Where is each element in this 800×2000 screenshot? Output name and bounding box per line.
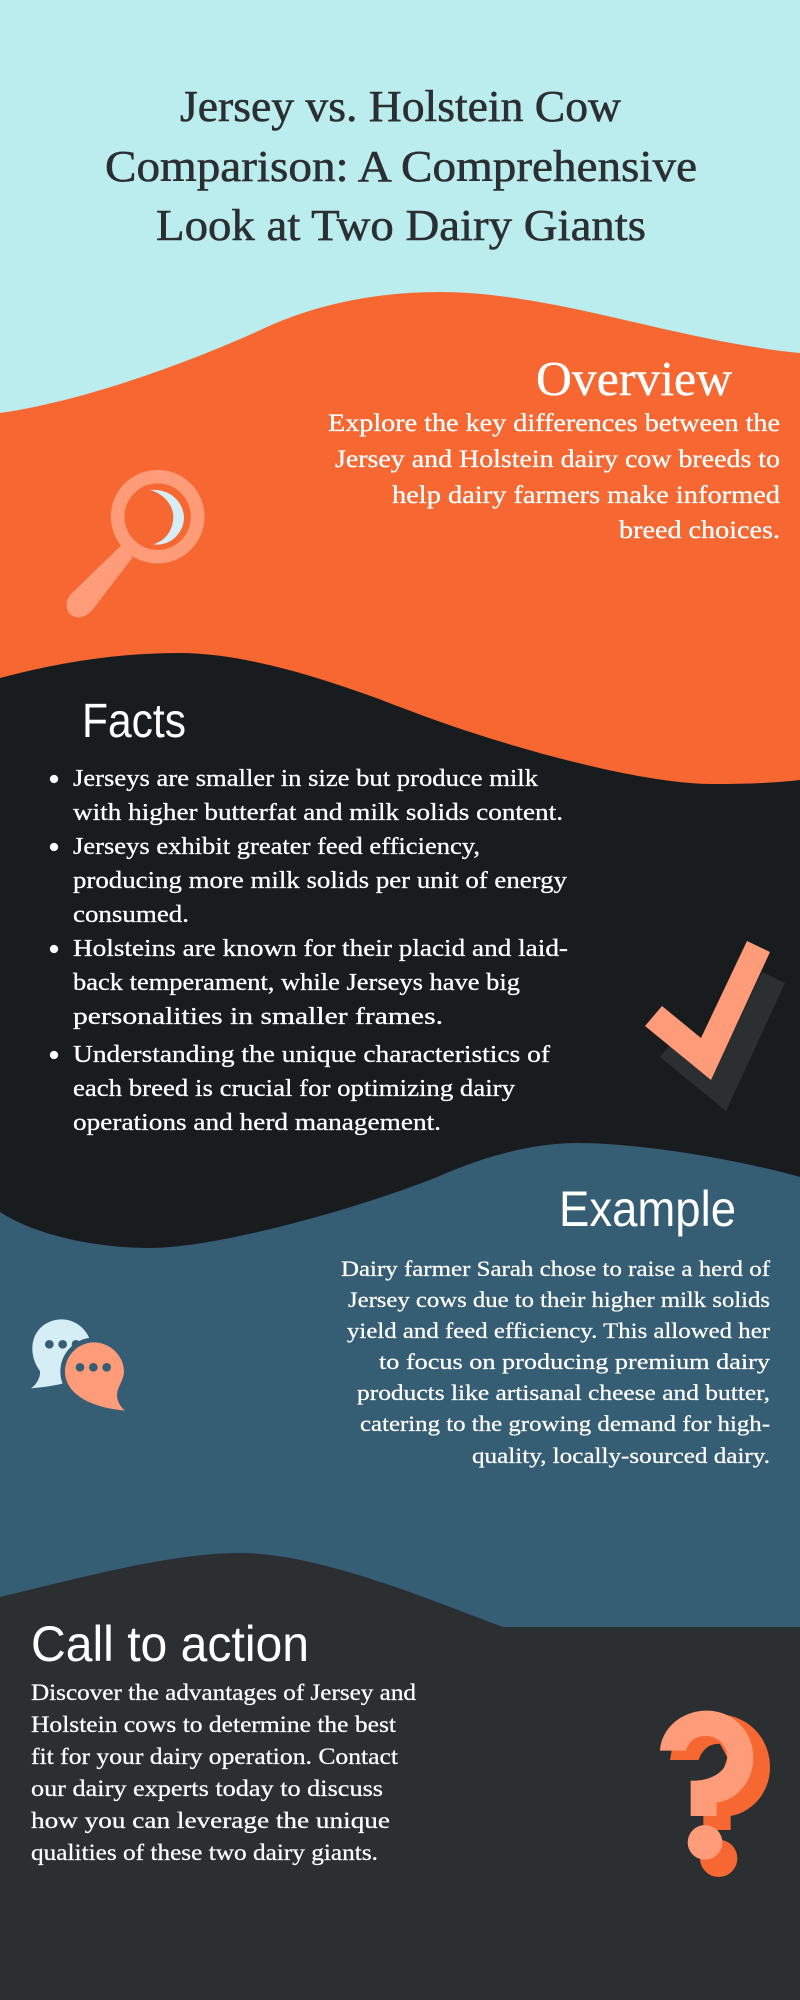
text block: call to action: [31, 1680, 417, 1865]
text block: example: [341, 1256, 771, 1468]
text block: facts list: operations and herd management.: [73, 1109, 441, 1136]
title: [105, 82, 697, 250]
text block: facts list: producing more milk solids per unit of energy: [73, 867, 568, 894]
text block: facts list: Understanding the unique characteristics of: [73, 1041, 551, 1068]
title: Look at Two Dairy Giants: [156, 201, 646, 250]
text block: example: catering to the growing demand for high-: [360, 1411, 770, 1436]
text block: facts list: personalities in smaller frames.: [73, 1003, 443, 1030]
text block: facts list: each breed is crucial for optimizing dairy: [73, 1075, 516, 1102]
heading: example: Example: [559, 1181, 736, 1237]
text block: overview: [328, 410, 781, 544]
heading: facts: Facts: [82, 695, 186, 748]
icon: check mark: [645, 941, 785, 1111]
icon: question mark: [660, 1711, 770, 1877]
text block: call to action: fit for your dairy operation. Contact: [31, 1744, 399, 1769]
text block: overview: Explore the key differences between the: [328, 410, 780, 437]
text block: facts list: back temperament, while Jerseys have big: [73, 969, 520, 996]
text block: overview: help dairy farmers make informed: [392, 482, 781, 509]
text block: call to action: qualities of these two dairy giants.: [31, 1840, 378, 1865]
text block: facts list: [50, 765, 568, 1136]
text block: example: products like artisanal cheese and butter,: [357, 1380, 770, 1405]
panel: call to action background: [0, 1553, 800, 2000]
panel: overview background: [0, 292, 800, 820]
text block: facts list: Jerseys exhibit greater feed efficiency,: [73, 833, 480, 860]
text block: example: Dairy farmer Sarah chose to raise a herd of: [341, 1256, 771, 1281]
text block: facts list: Jerseys are smaller in size but produce milk: [73, 765, 539, 792]
text block: example: Jersey cows due to their higher milk solids: [348, 1287, 770, 1312]
text block: call to action: Holstein cows to determine the best: [31, 1712, 397, 1737]
text block: facts list: with higher butterfat and milk solids content.: [73, 799, 563, 826]
text block: overview: breed choices.: [619, 517, 780, 544]
text block: example: yield and feed efficiency. This allowed her: [347, 1318, 771, 1343]
text block: facts list: Holsteins are known for their placid and laid-: [73, 935, 568, 962]
panel: title background: [0, 0, 800, 500]
text block: call to action: how you can leverage the unique: [31, 1808, 390, 1833]
text block: overview: Jersey and Holstein dairy cow breeds to: [335, 446, 780, 473]
panel: example background: [0, 1143, 800, 1650]
text block: call to action: Discover the advantages of Jersey and: [31, 1680, 417, 1705]
icon: magnifying glass: [67, 477, 198, 617]
text block: facts list: consumed.: [73, 901, 189, 928]
title: Jersey vs. Holstein Cow: [180, 82, 621, 131]
text block: example: to focus on producing premium dairy: [379, 1349, 770, 1374]
title: Comparison: A Comprehensive: [105, 142, 697, 191]
text block: example: quality, locally-sourced dairy.: [472, 1443, 770, 1468]
heading: overview: Overview: [536, 351, 733, 406]
text block: call to action: our dairy experts today to discuss: [31, 1776, 383, 1801]
panel: facts background: [0, 653, 800, 1300]
icon: speech bubbles: [31, 1319, 125, 1411]
heading: call to action: Call to action: [31, 1616, 309, 1672]
